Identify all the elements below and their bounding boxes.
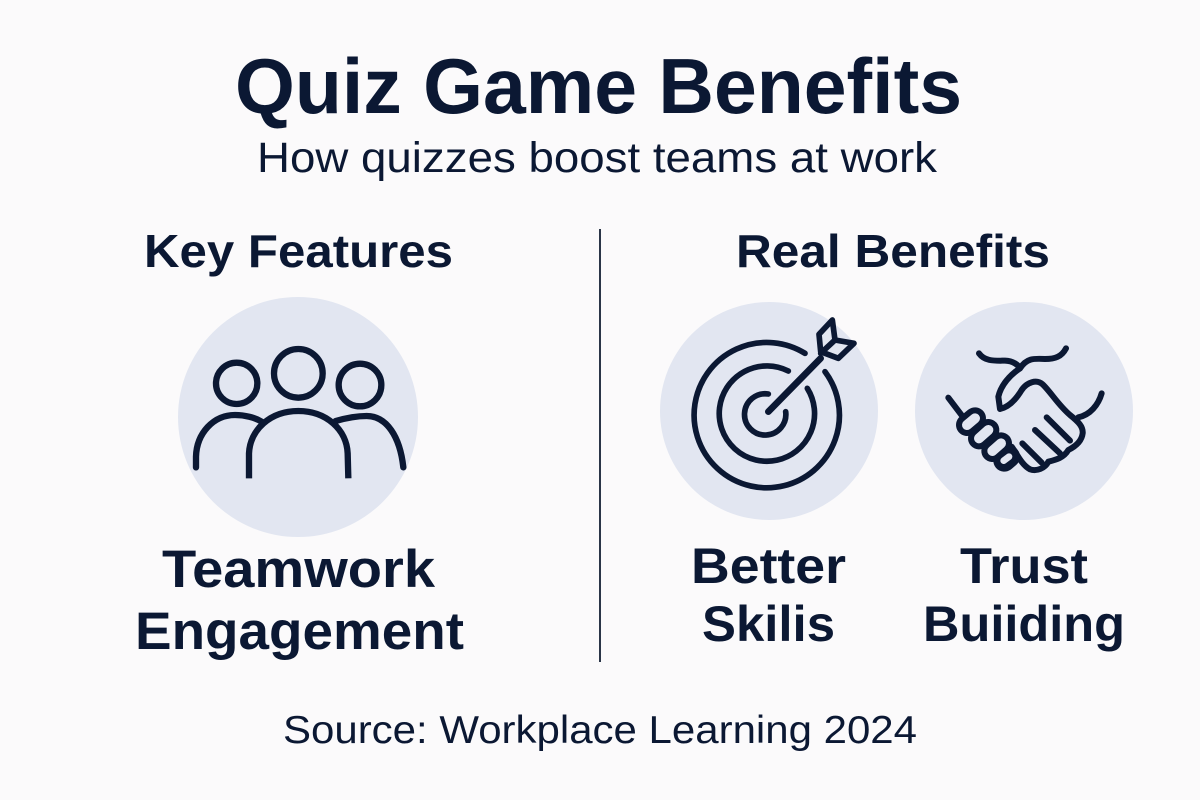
heading: real benefits: Real Benefits xyxy=(736,225,1050,277)
label: trust building: Buiiding xyxy=(923,596,1125,652)
icon: handshake xyxy=(915,302,1133,520)
label: teamwork engagement: Teamwork xyxy=(162,540,436,599)
panel: real benefits xyxy=(660,225,1133,652)
label: teamwork engagement xyxy=(135,540,464,661)
title: Quiz Game Benefits xyxy=(235,42,962,130)
label: trust building: Trust xyxy=(960,538,1088,594)
heading: key features: Key Features xyxy=(144,225,453,277)
source note: Source: Workplace Learning 2024 xyxy=(283,709,917,752)
subtitle: How quizzes boost teams at work xyxy=(257,134,938,182)
icon: target with arrow xyxy=(660,302,878,520)
label: better skills: Better xyxy=(691,538,846,594)
label: better skills: Skilis xyxy=(702,596,835,652)
label: trust building xyxy=(923,538,1125,652)
divider xyxy=(599,229,601,662)
label: teamwork engagement: Engagement xyxy=(135,602,464,661)
label: better skills xyxy=(691,538,846,652)
icon: team of three people xyxy=(178,297,418,537)
panel: key features xyxy=(135,225,464,661)
